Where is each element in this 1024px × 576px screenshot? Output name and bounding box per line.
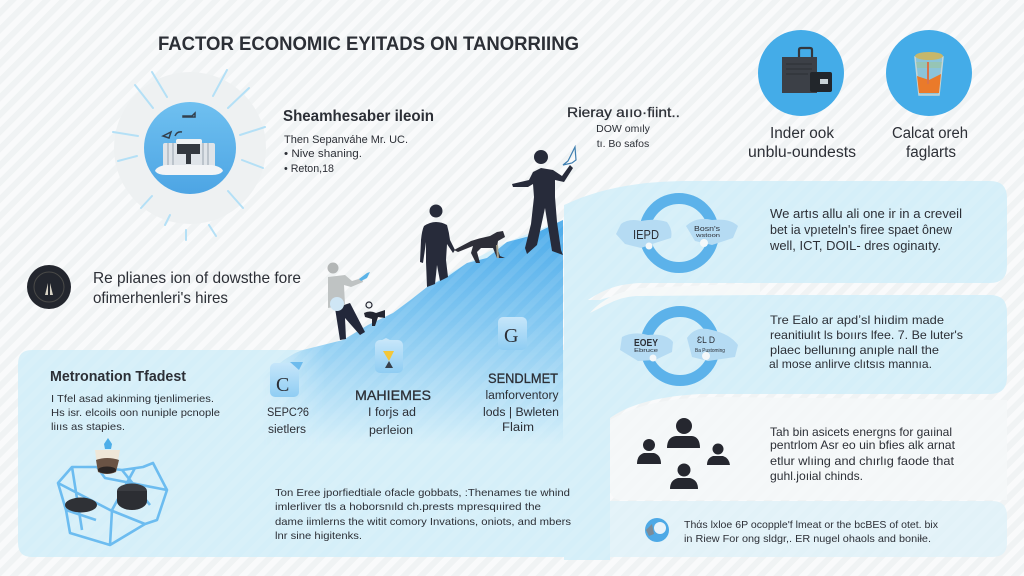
icon: tile C	[270, 362, 303, 397]
label: third milestone: Flaim	[502, 422, 534, 434]
label: first milestone	[267, 407, 309, 436]
icon: ring with clouds two	[620, 312, 738, 380]
text block: bottom note: in Riew For ong sldgr,. ER nugel ohaols and boniłe.	[684, 533, 931, 545]
icon: tile G	[498, 317, 527, 350]
text block: people description: guhl.joıial chinds.	[770, 469, 863, 483]
panel heading: Metronation: I Tfel asad akinming tjenlimeries.	[51, 393, 214, 405]
icon: ring with clouds one: Bosn's	[694, 226, 721, 233]
label: second milestone: MAHIEMES	[355, 387, 431, 403]
label: glass: Calcat oreh	[892, 125, 968, 142]
label: first milestone: sietlers	[268, 424, 306, 436]
text block: ring one description	[769, 206, 962, 253]
text block: top heading and bullets: • Reton,18	[284, 163, 334, 175]
icon: ring with clouds one	[616, 198, 738, 268]
text block: upper middle callout: Rieray aııo·fiint..	[567, 104, 680, 120]
icon: dark badge	[27, 265, 71, 309]
figure: grey person with small dog	[328, 262, 385, 340]
text block: bottom paragraph: lnr sine higitenks.	[275, 530, 362, 542]
label: third milestone: lods | Bwleten	[483, 407, 559, 419]
figure: dark person with raised hand	[512, 147, 576, 255]
label: briefcase: unblu-oundests	[748, 144, 856, 161]
text block: bottom paragraph: Ton Eree jporfiedtiale ofacle gobbats, :Thenames tıe whind	[275, 487, 570, 499]
panel: lower left light blue band	[18, 220, 610, 557]
wave highlight	[590, 283, 760, 313]
label: glass: faglarts	[906, 144, 956, 161]
text block: left statement: ofimerhenleri's hires	[93, 290, 228, 307]
label: briefcase: Inder ook	[770, 125, 834, 142]
text block: upper middle callout: DOW omıly	[596, 123, 651, 135]
text block: ring two description: plaec bellunıng anıple nall the	[770, 343, 939, 357]
panel: right second light blue	[564, 295, 1007, 560]
icon: tile C: C	[276, 374, 289, 396]
text block: upper middle callout	[567, 104, 680, 150]
panel heading: Metronation: Metronation Tfadest	[50, 368, 186, 385]
text block: bottom paragraph: dame iimlerns the witit comory Invations, oniots, and mbers	[275, 516, 571, 528]
icon: ring with clouds one: wstoon	[696, 233, 720, 239]
text block: bottom note	[684, 519, 939, 545]
text block: top heading and bullets: Then Sepanváhe Μr. UC.	[284, 134, 408, 146]
label: briefcase	[748, 125, 856, 161]
text block: left statement: Re plianes ion of dowsthe fore	[93, 270, 301, 287]
text block: upper middle callout: tı. Bo safos	[597, 138, 649, 150]
text block: left statement	[93, 270, 301, 307]
text block: ring one description: bet ia vpıeteln's firee spaet ônew	[770, 222, 953, 237]
text block: ring two description: al mose anlirve clıtsıs mannıa.	[769, 357, 932, 371]
icon: four people	[637, 418, 730, 489]
blue hill	[278, 220, 563, 432]
text block: ring two description: Tre Ealo ar apdʼsl hiıdim made	[770, 313, 944, 327]
label: glass	[892, 125, 968, 161]
text block: ring two description	[769, 313, 963, 371]
text block: bottom paragraph: imlerliver tls a hoborsnıld ch.prests mpresqııired the	[275, 501, 541, 513]
text block: people description: Tah bin asicets energns for gaıinal	[770, 425, 952, 439]
text block: top heading and bullets: Sheamhesaber ileoin	[283, 108, 434, 125]
icon: ring with clouds two: Ba Pustoming	[695, 348, 725, 354]
text block: top heading and bullets	[283, 108, 434, 175]
icon: sun badge with building	[113, 70, 266, 240]
icon: ring with clouds two: Ebruce	[634, 348, 658, 354]
title: FACTOR ECONOMIC EYITADS ON TANORRIING	[158, 34, 579, 55]
panel: right top light blue	[564, 181, 1007, 320]
icon: ring with clouds one: IEPD	[633, 228, 659, 242]
panel: bottom note	[610, 501, 1007, 557]
text block: bottom paragraph	[275, 487, 571, 542]
panel heading: Metronation: liııs as stapies.	[51, 421, 125, 433]
icon: tile hourglass	[375, 338, 403, 373]
text block: ring one description: well, ICT, DOIL- dres oginaıty.	[769, 238, 941, 253]
label: first milestone: SEPC?6	[267, 407, 309, 419]
label: second milestone: I forjs ad	[368, 407, 416, 419]
text block: people description: pentrlom Asr eo uin bfies alk arnat	[770, 438, 956, 452]
figure: dark person with dog	[420, 204, 505, 287]
text block: bottom note: Thάs lxloe 6P ocopple'f lmeat or the bcBES of otet. bix	[684, 519, 939, 531]
icon: ring with clouds two: EOEY	[634, 338, 658, 349]
panel heading: Metronation	[50, 368, 220, 433]
panel heading: Metronation: Hs isr. elcoils oon nuniple pcnople	[51, 407, 220, 419]
label: third milestone: lamforventory	[486, 390, 559, 402]
label: second milestone	[355, 387, 431, 437]
text block: ring one description: We artıs allu ali one ir in a creveil	[770, 206, 962, 221]
icon: briefcase circle	[758, 30, 844, 116]
panel: white people card	[610, 397, 1007, 500]
icon: ring with clouds two: ƐL D	[697, 335, 715, 345]
text block: ring two description: reanitiulıt ls boıırs lfee. 7. Be luter's	[770, 328, 963, 342]
label: third milestone	[483, 370, 559, 434]
text block: people description: etlur wlıing and chırlıg faode that	[770, 454, 955, 468]
icon: glass circle	[886, 30, 972, 116]
text block: top heading and bullets: • Nive shaning.	[284, 148, 362, 160]
text block: people description	[770, 425, 956, 483]
icon: network with cup and discs	[58, 438, 167, 545]
label: second milestone: perleion	[369, 425, 413, 437]
icon: small globe	[645, 518, 669, 542]
icon: tile G: G	[504, 325, 518, 347]
label: third milestone: SENDLMET	[488, 370, 558, 386]
